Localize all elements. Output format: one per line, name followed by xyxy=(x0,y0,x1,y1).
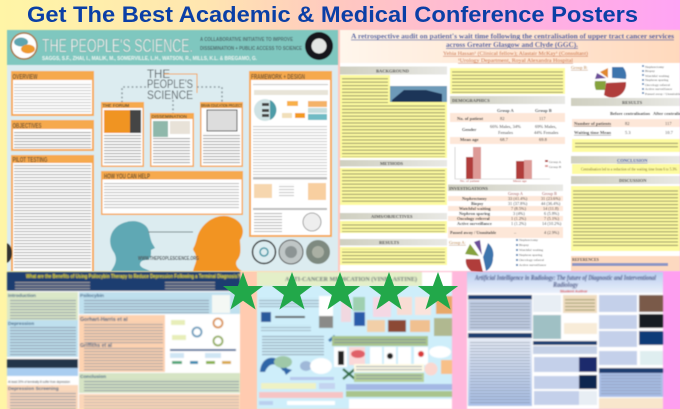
pie chart: group B: Active surveillance xyxy=(645,87,673,91)
side effect icons xyxy=(334,346,451,367)
panel: pilot testing: PILOT TESTING xyxy=(12,155,48,164)
poster header band: DISSEMINATION + PUBLIC ACCESS TO SCIENCE xyxy=(200,46,302,52)
connector between heads xyxy=(148,231,193,233)
pie chart: group B: Nephron sparing xyxy=(645,78,669,82)
pie chart: group B: Passed away / Unsuitable xyxy=(645,92,680,96)
bar chart xyxy=(455,147,562,183)
center logo: The People's Science: SCIENCE xyxy=(147,90,193,102)
investigations table: Nephrectomy xyxy=(462,196,488,201)
column: background and methods: RESULTS xyxy=(379,240,400,245)
poster header xyxy=(257,272,452,286)
poster title block: across Greater Glasgow and Clyde (GGC). xyxy=(446,41,578,49)
results table: 82 xyxy=(625,121,630,126)
silhouette: teal head xyxy=(110,221,155,271)
column: demographics and investigations xyxy=(448,68,565,272)
investigations table: 31 (37.8%) xyxy=(508,201,528,206)
poster title: Student Author xyxy=(560,290,588,294)
pie chart: group A: Oncology referral xyxy=(519,258,544,262)
demographics table: Gender xyxy=(462,127,477,132)
panel: depression xyxy=(7,320,78,357)
poster title block: ¹Urology Department, Royal Alexandra Hospital xyxy=(458,58,573,64)
panel: how you can help: HOW YOU CAN HELP xyxy=(104,174,150,180)
pie chart: group A: Nephron sparing xyxy=(519,253,543,257)
investigations table: Group B xyxy=(542,191,557,196)
demographics table: 69% Males, xyxy=(535,124,556,130)
panel: framework + design xyxy=(249,71,332,237)
column: demographics and investigations: INVESTIGATIONS xyxy=(449,186,488,191)
panel: psilocybin xyxy=(79,292,240,314)
poster header band: THE PEOPLE'S SCIENCE. xyxy=(42,36,193,56)
demographics table: No. of patient xyxy=(457,116,484,121)
demographics table: Group B xyxy=(535,108,552,113)
panel: overview: OVERVIEW xyxy=(12,72,38,81)
rating stars xyxy=(223,272,458,310)
center logo: The People's Science: PEOPLE'S xyxy=(147,79,193,91)
panel: the forum: THE FORUM xyxy=(102,103,129,108)
intro text with icons xyxy=(259,298,324,357)
results table: Number of patients xyxy=(574,121,611,126)
poster title block: Yehia Hassan¹ (Clinical fellow); Alastair McKay¹ (Consultant) xyxy=(443,50,588,57)
investigations table xyxy=(448,191,563,238)
demographics table: 66% Males, 34% xyxy=(490,124,521,130)
center logo: The People's Science xyxy=(147,69,197,102)
poster header band: A COLLABORATIVE INITIATIVE TO IMPROVE xyxy=(200,37,293,43)
investigations table: 44 (36.4%) xyxy=(541,201,561,206)
column: results and conclusion: RESULTS xyxy=(622,100,643,105)
panel: how you can help xyxy=(101,171,243,215)
panel: gorhart-harris and griffiths: Gorhart-Harris et al xyxy=(80,317,128,323)
people statistic graphic: At least 20% of terminally ill suffer from depression xyxy=(8,380,70,384)
investigations table: Oncology referral xyxy=(457,216,491,221)
investigations table: Watchful waiting xyxy=(459,206,491,211)
panel: introduction xyxy=(7,292,78,320)
demographics table: 69.8 xyxy=(539,137,548,142)
poster title block xyxy=(340,30,680,64)
investigations table: Biopsy xyxy=(471,201,484,206)
demographics table: 117 xyxy=(539,116,546,121)
arrow and note strip xyxy=(329,336,428,346)
panel: introduction: Introduction xyxy=(8,293,36,299)
bar chart: Group A xyxy=(549,160,562,164)
institution logos xyxy=(252,240,330,264)
poster title: Radiology xyxy=(552,281,579,289)
results table: 117 xyxy=(665,121,672,126)
panel: conclusion xyxy=(79,373,240,393)
investigations table: Active surveillance xyxy=(457,221,492,226)
results table: Waiting time Mean xyxy=(574,130,611,135)
pie chart: group B: Group B: xyxy=(571,65,588,70)
panel: psilocybin therapy poster xyxy=(7,272,240,409)
column: results and conclusion xyxy=(571,65,680,271)
panel: dissemination: DISSEMINATION xyxy=(152,114,187,119)
pie chart: group B: Nephrectomy xyxy=(645,65,664,69)
panel: objectives xyxy=(11,120,94,151)
column: background and methods: AIMS/OBJECTIVES xyxy=(371,214,413,219)
pathology text boxes xyxy=(354,360,452,382)
demographics table: Group A xyxy=(497,108,515,113)
silhouette: orange head xyxy=(193,216,243,271)
demographics table xyxy=(450,108,565,144)
column: background and methods xyxy=(340,66,447,265)
pie chart: group B: Biopsy xyxy=(645,69,655,73)
investigations table: 1 (1.2%) xyxy=(511,221,527,226)
pie chart: group B xyxy=(571,65,680,98)
panel: flow diagram xyxy=(166,315,240,372)
results table: 10.7 xyxy=(665,130,674,135)
panel: conclusion: Conclusion xyxy=(80,374,106,380)
decorative dark semicircle xyxy=(7,243,12,263)
bottom background segments xyxy=(240,272,257,409)
pie chart: group A: Group A: xyxy=(449,240,466,245)
investigations table: 7 (8.5%) xyxy=(511,206,527,211)
pie chart: group A: Biopsy xyxy=(519,243,529,247)
results table: 5.3 xyxy=(625,130,631,135)
investigations table: 7 (5.1%) xyxy=(544,216,560,221)
demographics table: 68.7 xyxy=(500,137,509,142)
panel: gorhart-harris and griffiths: Griffiths et al xyxy=(80,343,113,349)
demographics table: 44% Females xyxy=(534,130,559,135)
column: background and methods: METHODS xyxy=(380,161,404,166)
demographics table: 82 xyxy=(500,116,504,121)
column: results and conclusion: REFERENCES xyxy=(572,257,600,262)
bar chart: Group B xyxy=(549,165,562,169)
dotted connectors xyxy=(122,87,222,113)
panel: The People's Science poster xyxy=(7,30,338,271)
pie chart: group A: Nephrectomy xyxy=(519,238,538,242)
panel: anti-cancer medication poster xyxy=(257,272,452,409)
pie chart: group A: Watchful waiting xyxy=(519,248,543,252)
results table xyxy=(572,111,680,135)
panel: gorhart-harris and griffiths xyxy=(79,315,165,372)
investigations table: – xyxy=(513,230,517,235)
lower left arrow and organs xyxy=(260,356,334,380)
bar chart: Mean age xyxy=(513,179,527,183)
bar chart: No. of patient xyxy=(460,179,479,183)
poster header band: SAGGS, S.F., ZHAI, I., MALIK, M., SOMERVILLE, L.H., WATSON, R., MILLS, K.L. & BREGAMO, G. xyxy=(42,56,257,62)
poster header band xyxy=(7,30,338,65)
poster title block: A retrospective audit on patient's wait time following the centralisation of upper tract cancer services xyxy=(351,32,674,40)
panel: framework + design: FRAMEWORK + DESIGN xyxy=(251,72,305,81)
pie chart: group B: Oncology referral xyxy=(645,83,670,87)
pie chart: group B: Watchful waiting xyxy=(645,74,669,78)
panel: wait time audit poster xyxy=(340,30,680,272)
poster header: What are the Benefits of Using Psilocybin Therapy to Reduce Depression Following a Terminal Diagnosis? xyxy=(26,274,240,280)
panel: depression screening: Depression Screening xyxy=(8,386,59,392)
panel: brain education project: BRAIN EDUCATION PROJECT xyxy=(201,103,242,108)
drug images row xyxy=(319,296,365,328)
investigations table: 33 (41.4%) xyxy=(508,196,528,201)
panel: depression: Depression xyxy=(8,321,34,327)
poster header xyxy=(7,272,240,291)
people statistic graphic xyxy=(7,359,78,384)
lower info bands xyxy=(259,383,452,409)
column three: cards and conclusion xyxy=(599,295,663,409)
panel: psilocybin: Psilocybin xyxy=(80,293,104,299)
panel: dissemination xyxy=(150,113,194,167)
column: background and methods: BACKGROUND xyxy=(376,68,410,74)
column: results and conclusion: CONCLUSION xyxy=(617,158,648,163)
panel: artificial intelligence in radiology poster xyxy=(467,272,663,409)
panel: objectives: OBJECTIVES xyxy=(12,121,42,130)
panel: brain education project xyxy=(200,102,243,167)
investigations table: Passed away / Unsuitable xyxy=(450,230,496,235)
title: Get The Best Academic & Medical Conference Posters xyxy=(27,2,638,27)
panel: depression screening xyxy=(7,385,78,409)
investigations table: 14 (11.8) xyxy=(543,206,559,211)
investigations table: 4 (2.9%) xyxy=(544,230,560,235)
column two: images and text xyxy=(533,295,597,405)
investigations table: Nephron sparing xyxy=(459,211,491,216)
x icon xyxy=(343,369,355,379)
demographics table: Mean age xyxy=(460,137,479,142)
website url: WWW.THEPEOPLESCIENCE.ORG xyxy=(138,256,199,262)
column: demographics and investigations: DEMOGRAPHICS xyxy=(452,98,490,103)
investigations table: 6 (5.8%) xyxy=(544,211,560,216)
panel: references xyxy=(79,394,240,409)
panel: the forum xyxy=(101,102,144,167)
poster header: ANTI-CANCER MEDICATION (VINBLASTINE) xyxy=(285,276,417,283)
investigations table: 1 (1.2%) xyxy=(511,216,527,221)
panel: overview xyxy=(11,71,94,116)
pie chart: group A: Active surveillance xyxy=(519,263,547,267)
investigations table: 31 (23.6%) xyxy=(541,196,561,201)
column one: abstract and sections xyxy=(468,295,532,406)
column: results and conclusion: DISCUSSION xyxy=(619,178,647,183)
center logo: The People's Science: THE xyxy=(147,69,170,81)
symptom images xyxy=(367,296,452,336)
panel: pilot testing xyxy=(11,155,94,271)
investigations table: 3 (4%) xyxy=(513,211,525,216)
investigations table: Group A xyxy=(508,191,524,196)
pie chart: group A xyxy=(449,238,547,272)
investigations table: 14 (10.2%) xyxy=(542,221,562,226)
poster title xyxy=(467,272,663,294)
demographics table: Females xyxy=(498,130,513,135)
results table: Before centralisation xyxy=(610,111,651,116)
